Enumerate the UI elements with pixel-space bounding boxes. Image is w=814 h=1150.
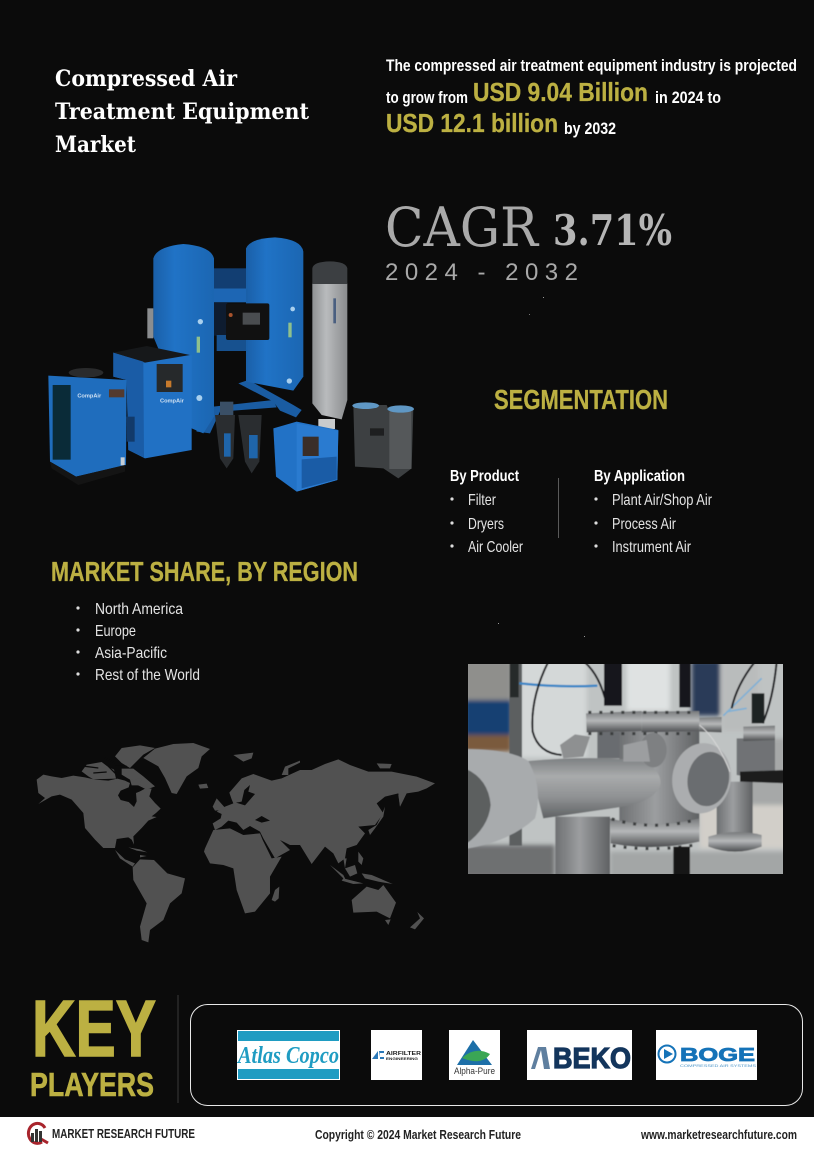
blurred background bbox=[465, 661, 787, 878]
Baltic and Black Sea bbox=[236, 785, 270, 823]
CAGR figure: 2024 - 2032 bbox=[385, 259, 578, 286]
market size projection text: in 2024 to bbox=[655, 88, 721, 107]
Africa bbox=[204, 828, 282, 913]
equipment product photo: CompAir bbox=[160, 399, 185, 405]
segmentation: by product: Filter bbox=[468, 492, 497, 509]
icon: small dryer bbox=[318, 419, 335, 429]
icon: grey filter column bbox=[312, 283, 347, 419]
solenoids bbox=[604, 661, 622, 706]
CAGR figure: 3.71% bbox=[553, 206, 672, 255]
segmentation heading: SEGMENTATION bbox=[494, 384, 668, 415]
post bbox=[509, 661, 522, 846]
right round flange bbox=[672, 743, 732, 814]
small flange left bbox=[560, 734, 590, 758]
Sakhalin and Japan bbox=[368, 792, 407, 835]
logo: Alpha-Pure bbox=[449, 1030, 500, 1080]
logo: Airfilter Engineering: ENGINEERING bbox=[386, 1056, 418, 1061]
industrial piping photo bbox=[465, 661, 787, 878]
segmentation: by application: By Application bbox=[594, 468, 685, 485]
logo: Atlas Copco bbox=[236, 1030, 340, 1080]
logo: BOGE: COMPRESSED AIR SYSTEMS bbox=[680, 1063, 756, 1068]
equipment product photo bbox=[48, 237, 414, 492]
title: Market bbox=[55, 132, 137, 158]
segmentation: by product: Dryers bbox=[468, 516, 504, 533]
title: Treatment Equipment bbox=[55, 99, 310, 125]
bottom flange bbox=[610, 818, 699, 847]
region list: North America bbox=[95, 601, 183, 618]
market size projection text: USD 12.1 billion bbox=[386, 108, 558, 138]
region list: Rest of the World bbox=[95, 667, 200, 684]
logo: BEKO bbox=[527, 1030, 632, 1080]
segmentation: by application: Plant Air/Shop Air bbox=[612, 492, 713, 509]
footer bbox=[0, 1117, 814, 1150]
CAGR figure bbox=[385, 196, 672, 286]
region list: Asia-Pacific bbox=[95, 645, 167, 662]
Madagascar bbox=[272, 887, 279, 902]
icon: right tank bbox=[246, 237, 303, 391]
Arctic islands bbox=[233, 753, 392, 775]
market size projection text: to grow from bbox=[386, 88, 468, 107]
key players heading bbox=[30, 984, 156, 1103]
rear right column bbox=[717, 782, 753, 835]
icon: first refrigerant dryer bbox=[48, 376, 127, 477]
key players logo panel bbox=[190, 1004, 802, 1106]
logo: Atlas Copco: Atlas Copco bbox=[236, 1043, 339, 1069]
icon: MRF logo bbox=[28, 1123, 48, 1143]
CAGR figure: CAGR bbox=[385, 196, 539, 259]
left large flange bbox=[465, 749, 538, 849]
segmentation: by product: Air Cooler bbox=[468, 539, 524, 556]
blue hose bbox=[519, 683, 597, 686]
logo: BEKO: BEKO bbox=[553, 1043, 631, 1075]
title bbox=[55, 66, 310, 158]
segmentation: by product bbox=[450, 468, 524, 556]
Eurasia and Europe bbox=[213, 753, 435, 864]
Southeast Asia islands bbox=[330, 852, 393, 884]
side flange centre bbox=[640, 733, 667, 767]
icon: inline filters bbox=[215, 415, 235, 468]
region list: Europe bbox=[95, 623, 136, 640]
title: Compressed Air bbox=[55, 66, 237, 92]
central column bbox=[596, 731, 620, 759]
logo: BOGE: BOGE bbox=[680, 1045, 755, 1065]
lower vertical pipe bbox=[555, 817, 610, 878]
Central America and Caribbean bbox=[115, 847, 147, 867]
region list bbox=[76, 601, 200, 684]
logo: Alpha-Pure: Alpha-Pure bbox=[454, 1066, 495, 1076]
segmentation: by application bbox=[594, 468, 713, 556]
segmentation: by product: By Product bbox=[450, 468, 520, 485]
Australia bbox=[352, 885, 396, 918]
top flanges bbox=[586, 711, 642, 732]
icon: separator unit bbox=[353, 405, 413, 478]
icon: second refrigerant dryer bbox=[113, 353, 192, 458]
North America and Arctic bbox=[37, 743, 210, 848]
world map bbox=[37, 743, 435, 942]
flange bolts bbox=[588, 712, 698, 849]
footer: MARKET RESEARCH FUTURE bbox=[52, 1126, 195, 1141]
market size projection text bbox=[386, 56, 797, 138]
Iceland bbox=[198, 784, 208, 789]
logo: BOGE bbox=[656, 1030, 757, 1080]
Greenland bbox=[143, 743, 210, 794]
market share heading: MARKET SHARE, BY REGION bbox=[51, 556, 358, 587]
logo: Airfilter Engineering bbox=[371, 1030, 422, 1080]
South America bbox=[133, 859, 185, 942]
segmentation: by application: Process Air bbox=[612, 516, 677, 533]
Great Britain bbox=[213, 798, 226, 811]
equipment product photo: CompAir bbox=[77, 393, 102, 399]
key players heading: KEY bbox=[32, 984, 156, 1073]
key players heading: PLAYERS bbox=[30, 1066, 154, 1103]
icon: tank connecting pipes bbox=[193, 268, 302, 433]
icon: left tank bbox=[153, 244, 214, 433]
footer: Copyright © 2024 Market Research Future bbox=[315, 1127, 521, 1142]
market size projection text: by 2032 bbox=[564, 119, 616, 138]
segmentation: by application: Instrument Air bbox=[612, 539, 692, 556]
icon: control panel bbox=[226, 303, 269, 340]
logo: Airfilter Engineering: AIRFILTER bbox=[386, 1051, 422, 1057]
main horizontal pipe bbox=[528, 758, 661, 818]
connector bbox=[740, 770, 787, 783]
black cables bbox=[532, 662, 777, 755]
New Zealand and Tasmania bbox=[385, 912, 424, 929]
market size projection text: USD 9.04 Billion bbox=[473, 77, 648, 107]
